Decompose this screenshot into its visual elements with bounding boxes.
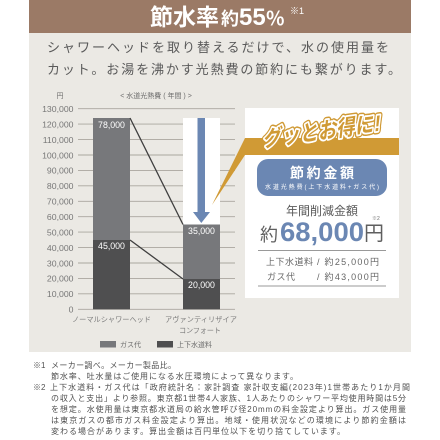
- footnotes: を想定。水使用量は東京都水道局の給水管呼び径20mmの料金設定より算出。ガス使用量: [51, 404, 406, 414]
- chart titles: 円: [56, 92, 64, 100]
- value: annual savings: 約: [260, 225, 278, 245]
- bar: Avanti Resia Comfort: 35,000: [188, 226, 215, 236]
- value: annual savings: 円: [364, 223, 384, 245]
- footnotes: ※2: [33, 383, 46, 392]
- panel: savings: [212, 108, 399, 298]
- y axis labels: 100,000: [42, 150, 74, 160]
- footnotes: は東京ガスの都市ガス料金設定より算出。地域・使用状況などの環境により節約金額は: [51, 415, 406, 425]
- bar: Avanti Resia Comfort: 20,000: [188, 280, 215, 290]
- cost breakdown: / 約43,000円: [317, 271, 379, 282]
- callout: great deal: グッとお得に!: [262, 109, 382, 152]
- heading: value: 約55％: [221, 4, 285, 31]
- footnotes: の収入と支出」より参照。東京都1世帯4人家族、1人あたりのシャワー平均使用時間は5分: [51, 393, 406, 403]
- white reduction column: [183, 118, 220, 224]
- y axis labels: 60,000: [47, 212, 74, 222]
- cost breakdown: [266, 256, 379, 282]
- legend: 上下水道料: [177, 340, 212, 349]
- arrow: reduction: [193, 118, 210, 223]
- footnotes: ※1: [33, 361, 46, 370]
- pill: saved amount: [257, 159, 387, 196]
- y axis labels: 30,000: [47, 258, 74, 268]
- label: annual reduction: 年間削減金額: [286, 203, 358, 218]
- y axis labels: 70,000: [47, 197, 74, 207]
- panel: background: [29, 33, 411, 352]
- footnotes: 上下水道料・ガス代は「政府統計名：家計調査 家計収支編(2023年)1世帯あたり1か月間: [50, 382, 410, 392]
- divider top: [258, 250, 386, 252]
- grid lines: [78, 109, 235, 309]
- cost breakdown: / 約25,000円: [317, 256, 379, 267]
- intro text: カット。お湯を沸かす光熱費の節約にも繋がります。: [47, 62, 401, 77]
- ribbon: [212, 138, 399, 205]
- callout: great deal: グッとお得に!: [262, 109, 382, 152]
- y axis labels: 40,000: [47, 243, 74, 253]
- bar: normal shower head: 78,000: [98, 120, 125, 130]
- callout: great deal: グッとお得に!: [262, 109, 382, 152]
- intro text: シャワーヘッドを取り替えるだけで、水の使用量を: [47, 40, 389, 55]
- footnotes: 節水率、吐水量はご使用になる水圧環境によって異なります。: [51, 371, 298, 381]
- footnotes: メーカー調べ。メーカー製品比。: [51, 360, 176, 370]
- connector lines: [130, 118, 183, 279]
- y axis labels: [42, 104, 74, 314]
- x axis labels: ノーマルシャワーヘッド: [72, 315, 151, 324]
- footnotes: [33, 360, 410, 436]
- y axis labels: 80,000: [47, 181, 74, 191]
- x axis labels: コンフォート: [179, 326, 221, 335]
- value: annual savings: [260, 216, 384, 247]
- cost breakdown: ガス代: [267, 272, 295, 282]
- legend: ガス代: [120, 340, 141, 349]
- bar: normal shower head: 45,000: [98, 241, 125, 251]
- value: annual savings: ※2: [372, 216, 380, 222]
- value: annual savings: 68,000: [280, 217, 364, 247]
- x axis labels: [72, 315, 237, 335]
- x axis labels: アヴァンティリザイア: [165, 315, 237, 324]
- header band: [29, 0, 411, 33]
- y axis labels: 20,000: [47, 274, 74, 284]
- pill: saved amount: 水道光熱費(上下水道料+ガス代): [265, 183, 379, 191]
- heading: water saving rate: 節水率: [150, 4, 219, 30]
- chart titles: [56, 91, 192, 100]
- legend: [100, 340, 212, 349]
- divider bottom: [258, 285, 386, 287]
- y axis labels: 50,000: [47, 227, 74, 237]
- cost breakdown: 上下水道料: [266, 256, 313, 267]
- bar: Avanti Resia Comfort: [183, 224, 220, 309]
- intro text: [47, 40, 401, 77]
- y axis labels: 110,000: [43, 135, 74, 145]
- y axis labels: 90,000: [47, 166, 74, 176]
- heading: note mark: ※1: [290, 6, 304, 16]
- y axis labels: 120,000: [42, 119, 74, 129]
- bar: normal shower head: [93, 118, 130, 309]
- chart titles: < 水道光熱費 ( 年間 ) >: [120, 91, 192, 100]
- pill: saved amount: 節約金額: [290, 165, 354, 181]
- footnotes: 変わる場合があります。算出金額は百円単位以下を切り捨てしています。: [51, 426, 345, 436]
- y axis labels: 10,000: [47, 289, 74, 299]
- y axis labels: 0: [69, 304, 74, 314]
- y axis labels: 130,000: [42, 104, 74, 114]
